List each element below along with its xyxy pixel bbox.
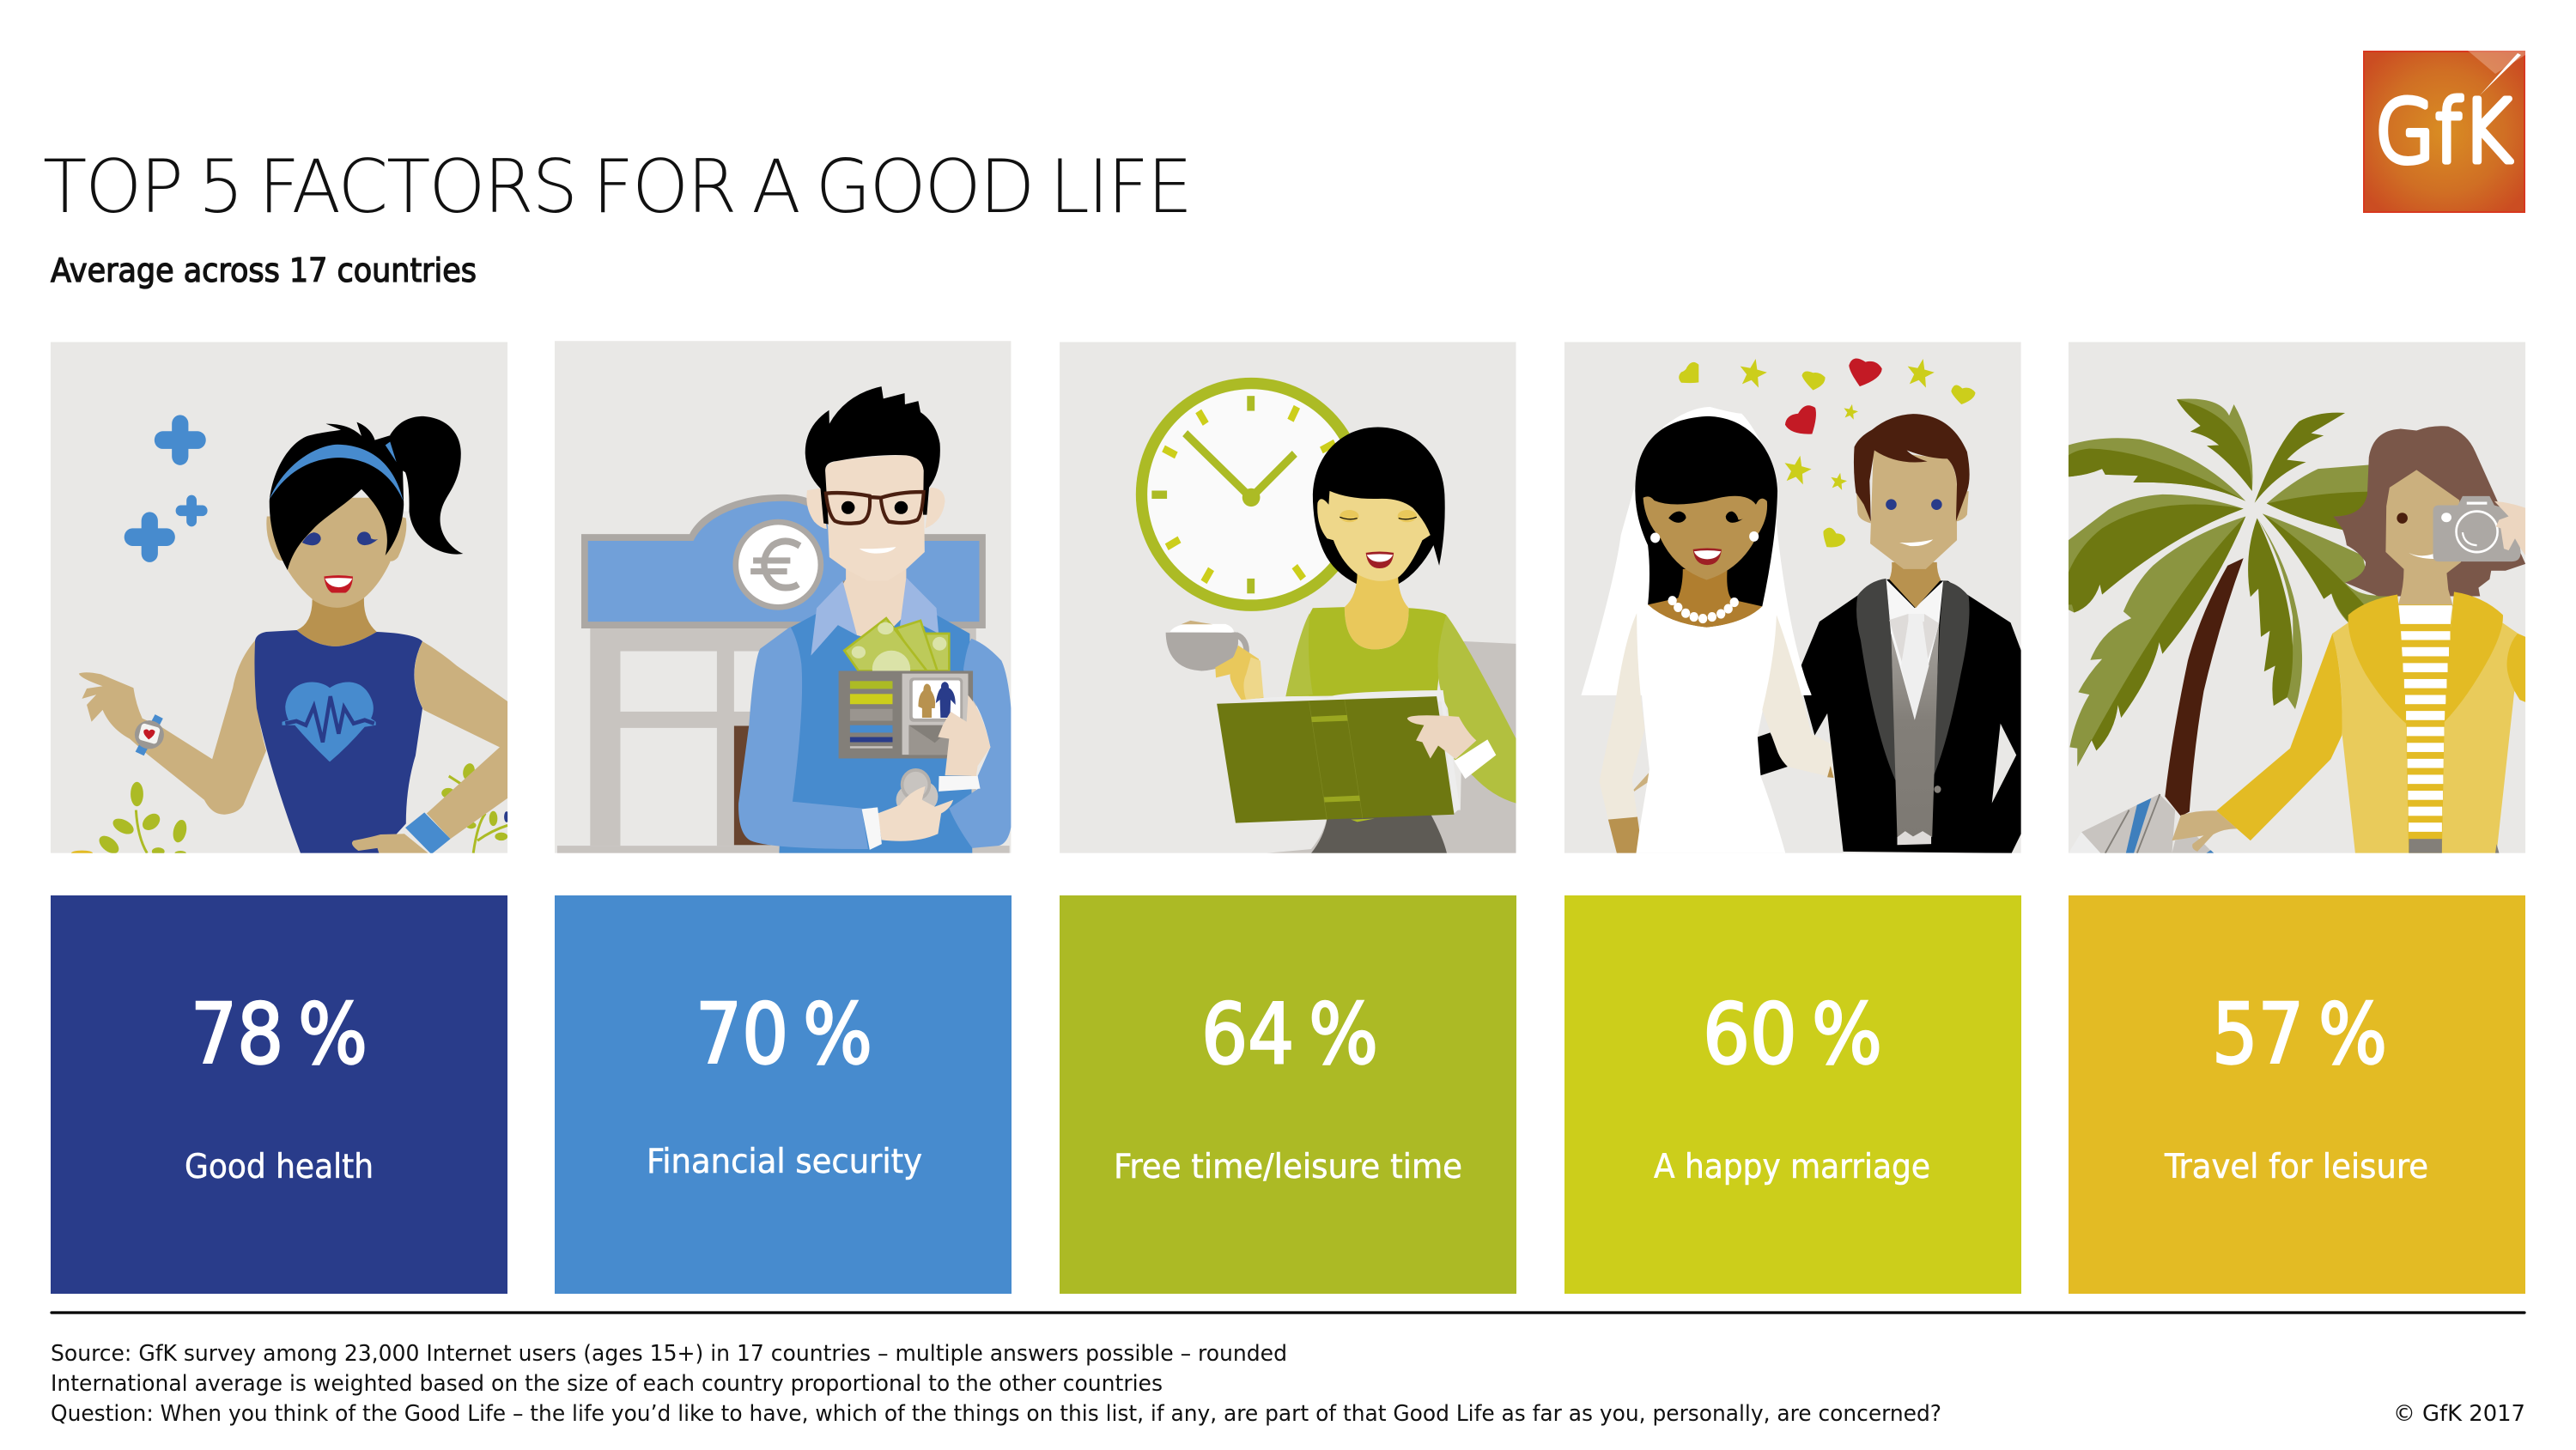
- panel: happy marriage illustration: [1564, 342, 2021, 853]
- stat box: financial security: Financial security: [647, 1143, 922, 1181]
- woman figure: [79, 416, 507, 854]
- source notes: Question: When you think of the Good Life – the life you’d like to have, which of the things on this list, if any, are part of that Good Life as far as you, personally, are concerned?: [51, 1401, 1941, 1427]
- hearts and stars: [1679, 359, 1975, 547]
- stat box: travel for leisure: [2069, 895, 2525, 1294]
- bride: [1581, 407, 1834, 853]
- icon: health plus signs: [132, 424, 203, 554]
- reading woman: [1166, 428, 1516, 853]
- stat box: free time: [1060, 895, 1516, 1294]
- stat box: happy marriage: A happy marriage: [1654, 1148, 1930, 1186]
- subtitle: Average across 17 countries: [51, 252, 477, 289]
- title: TOP 5 FACTORS FOR A GOOD LIFE: [43, 144, 1191, 230]
- stat box: good health: [51, 895, 507, 1294]
- stat box: free time: Free time/leisure time: [1114, 1148, 1462, 1186]
- sofa: [1267, 641, 1516, 853]
- source notes: International average is weighted based on the size of each country proportional to the other countries: [51, 1371, 1163, 1397]
- book: [1217, 690, 1496, 823]
- logo: GfK: GfK: [2375, 82, 2512, 182]
- bank building: [557, 494, 1010, 853]
- panel: free time illustration: [1060, 342, 1516, 853]
- stat box: financial security: [555, 895, 1012, 1294]
- stat box: travel for leisure: 57 %: [2212, 986, 2387, 1083]
- panel: good health illustration: [51, 342, 509, 857]
- palm tree: [2069, 399, 2401, 816]
- copyright: © GfK 2017: [2393, 1401, 2525, 1427]
- stat box: happy marriage: 60 %: [1703, 986, 1882, 1083]
- stat box: happy marriage: [1564, 895, 2021, 1294]
- panel: financial security illustration: [555, 341, 1011, 853]
- logo: GfK: [2363, 51, 2525, 213]
- source notes: [51, 1341, 1941, 1427]
- stat box: good health: 78 %: [191, 986, 368, 1083]
- clock: [1136, 378, 1366, 611]
- panel: travel for leisure illustration: [2069, 342, 2525, 853]
- woman with camera: [2172, 426, 2525, 853]
- map: [2069, 794, 2214, 853]
- plants: [71, 762, 509, 857]
- stat box: good health: Good health: [185, 1148, 374, 1186]
- stat box: free time: 64 %: [1201, 986, 1378, 1083]
- stat box: financial security: 70 %: [696, 986, 872, 1083]
- groom: [1633, 414, 2021, 853]
- source notes: Source: GfK survey among 23,000 Internet users (ages 15+) in 17 countries – multiple answers possible – rounded: [51, 1341, 1287, 1367]
- stat box: travel for leisure: Travel for leisure: [2164, 1148, 2428, 1186]
- man with wallet: [738, 386, 1011, 853]
